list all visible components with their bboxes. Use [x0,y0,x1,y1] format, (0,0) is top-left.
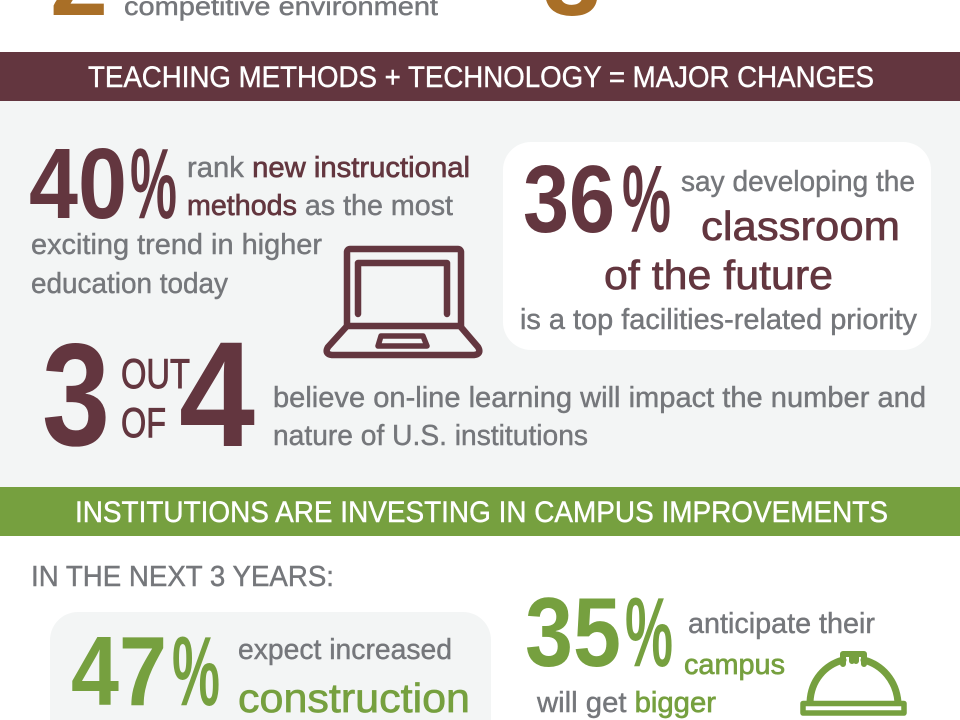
stat: 40 percent: methods as the most [187,190,453,222]
stat: 3 out of 4: believe on-line learning will impact the number and [273,382,926,414]
stat: 35 percent: 35 [525,577,621,687]
icon: hard hat [803,654,904,713]
stat: 3 out of 4 [42,310,926,478]
panel: classroom of the future: is a top facilities-related priority [520,304,917,336]
panel: construction: expect increased [238,634,452,666]
stat: 35 percent [525,577,875,719]
stat: 40 percent: exciting trend in higher [31,229,322,261]
panel: teaching methods background [0,101,960,487]
top section remnant [50,0,601,37]
stat: 40 percent: education today [31,268,228,300]
banner: campus improvements [0,487,960,536]
stat: 3 out of 4: 3 [42,313,110,476]
panel: classroom of the future: classroom [701,203,900,249]
stat: 40 percent: % [130,128,177,240]
panel: classroom of the future [503,142,931,350]
panel: classroom of the future: of the future [604,252,833,298]
icon: laptop [327,249,479,355]
stat: 3 out of 4: 4 [179,310,255,478]
banner: teaching methods: TEACHING METHODS + TECHNOLOGY = MAJOR CHANGES [88,61,874,94]
stat: 40 percent: rank new instructional [187,152,470,184]
panel: classroom of the future: % [622,146,671,253]
heading: in the next 3 years: IN THE NEXT 3 YEARS: [31,561,334,593]
stat: 35 percent: campus [684,649,785,681]
stat: 40 percent [29,128,470,300]
stat: 35 percent: % [625,577,673,687]
stat: 3 out of 4: OUT [121,350,190,397]
stat: 3 out of 4: OF [121,399,166,446]
panel: classroom of the future: 36 [523,146,615,253]
stat: 35 percent: will get bigger [536,687,716,719]
panel: construction [50,612,491,720]
stat: 3 out of 4: nature of U.S. institutions [273,420,588,452]
stat: 40 percent: 40 [29,128,127,240]
banner: campus improvements: INSTITUTIONS ARE INVESTING IN CAMPUS IMPROVEMENTS [75,496,888,529]
panel: classroom of the future: say developing the [681,166,915,198]
banner: teaching methods [0,52,960,101]
panel: construction: construction [238,675,470,720]
stat: 35 percent: anticipate their [688,608,875,640]
